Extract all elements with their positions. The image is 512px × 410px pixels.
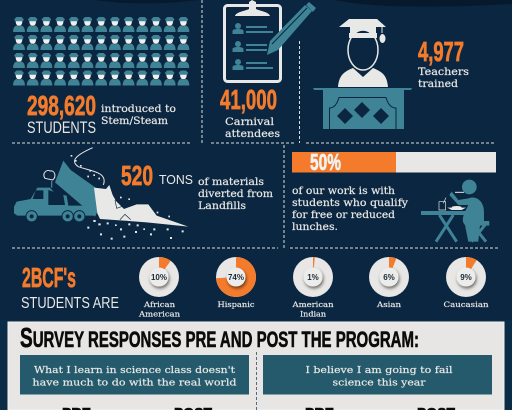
progress bar: 50% [292,149,496,175]
stat: carnival attendees: attendees [225,129,280,140]
donut: African American 10%: African [143,300,175,309]
icon: student eating at table [421,180,489,242]
icon: clipboard and pencil [224,0,316,82]
question box: real world: What I learn in science class doesn't [34,365,235,376]
text: free or reduced lunches: of our work is with [292,186,396,197]
donut: American Indian 1%: Indian [300,310,326,318]
icon: graduate teacher at desk [313,19,412,129]
stat: carnival attendees [220,84,280,140]
heading: students are: STUDENTS ARE [21,295,119,312]
donut: American Indian 1%: 1% [307,273,319,282]
donut: African American 10% [138,257,180,318]
donut: Hispanic 74%: 74% [228,273,244,282]
stat: students: Stem/Steam [101,115,168,127]
stat: tons diverted [121,160,274,212]
icon: dump truck [14,148,188,240]
question box: fail science [263,355,492,394]
question box: fail science: I believe I am going to fail [306,365,452,376]
stat: teachers trained: Teachers [418,67,469,78]
donut: American Indian 1% [291,257,334,318]
panel: survey responses [0,320,512,410]
column labels: pre and post [62,405,455,410]
donut: Caucasian 9%: Caucasian [444,300,489,309]
question box: fail science: science this year [332,378,426,388]
stat: students [27,90,176,137]
heading: students are [21,262,119,312]
progress bar: 50%: 50% [310,149,341,175]
stat: tons diverted: Landfills [198,201,246,212]
stat: teachers trained: 4,977 [418,36,464,67]
donut: African American 10%: 10% [151,273,167,282]
stat: teachers trained [418,36,469,90]
donut: Asian 6% [369,257,409,309]
stat: students: 298,620 [27,90,96,121]
stat: students: introduced to [101,103,176,115]
donut: Caucasian 9%: 9% [460,273,472,282]
text: free or reduced lunches [292,186,408,233]
text: free or reduced lunches: students who qualify [292,198,408,209]
text: free or reduced lunches: lunches. [292,222,338,233]
donut: Caucasian 9% [444,257,489,309]
stat: teachers trained: trained [418,79,459,90]
question box: real world [20,355,249,394]
donut: Hispanic 74%: Hispanic [218,300,254,309]
student icon grid [13,17,189,86]
donut: Asian 6%: 6% [383,273,395,282]
stat: tons diverted: TONS [159,172,193,187]
heading: students are: 2BCF's [22,262,76,293]
question box: real world: have much to do with the real world [32,378,236,388]
stat: tons diverted: 520 [121,160,153,191]
donut: American Indian 1%: American [291,300,334,309]
stat: students: STUDENTS [27,119,96,137]
donut: African American 10%: American [138,310,180,318]
top banner shadow [95,0,512,7]
donut: Asian 6%: Asian [376,300,401,309]
stat: tons diverted: diverted from [198,189,274,200]
stat: carnival attendees: Carnival [225,117,274,128]
stat: carnival attendees: 41,000 [220,84,277,115]
text: free or reduced lunches: for free or reduced [292,210,396,221]
stat: tons diverted: of materials [198,177,264,188]
donut: Hispanic 74% [216,257,256,309]
